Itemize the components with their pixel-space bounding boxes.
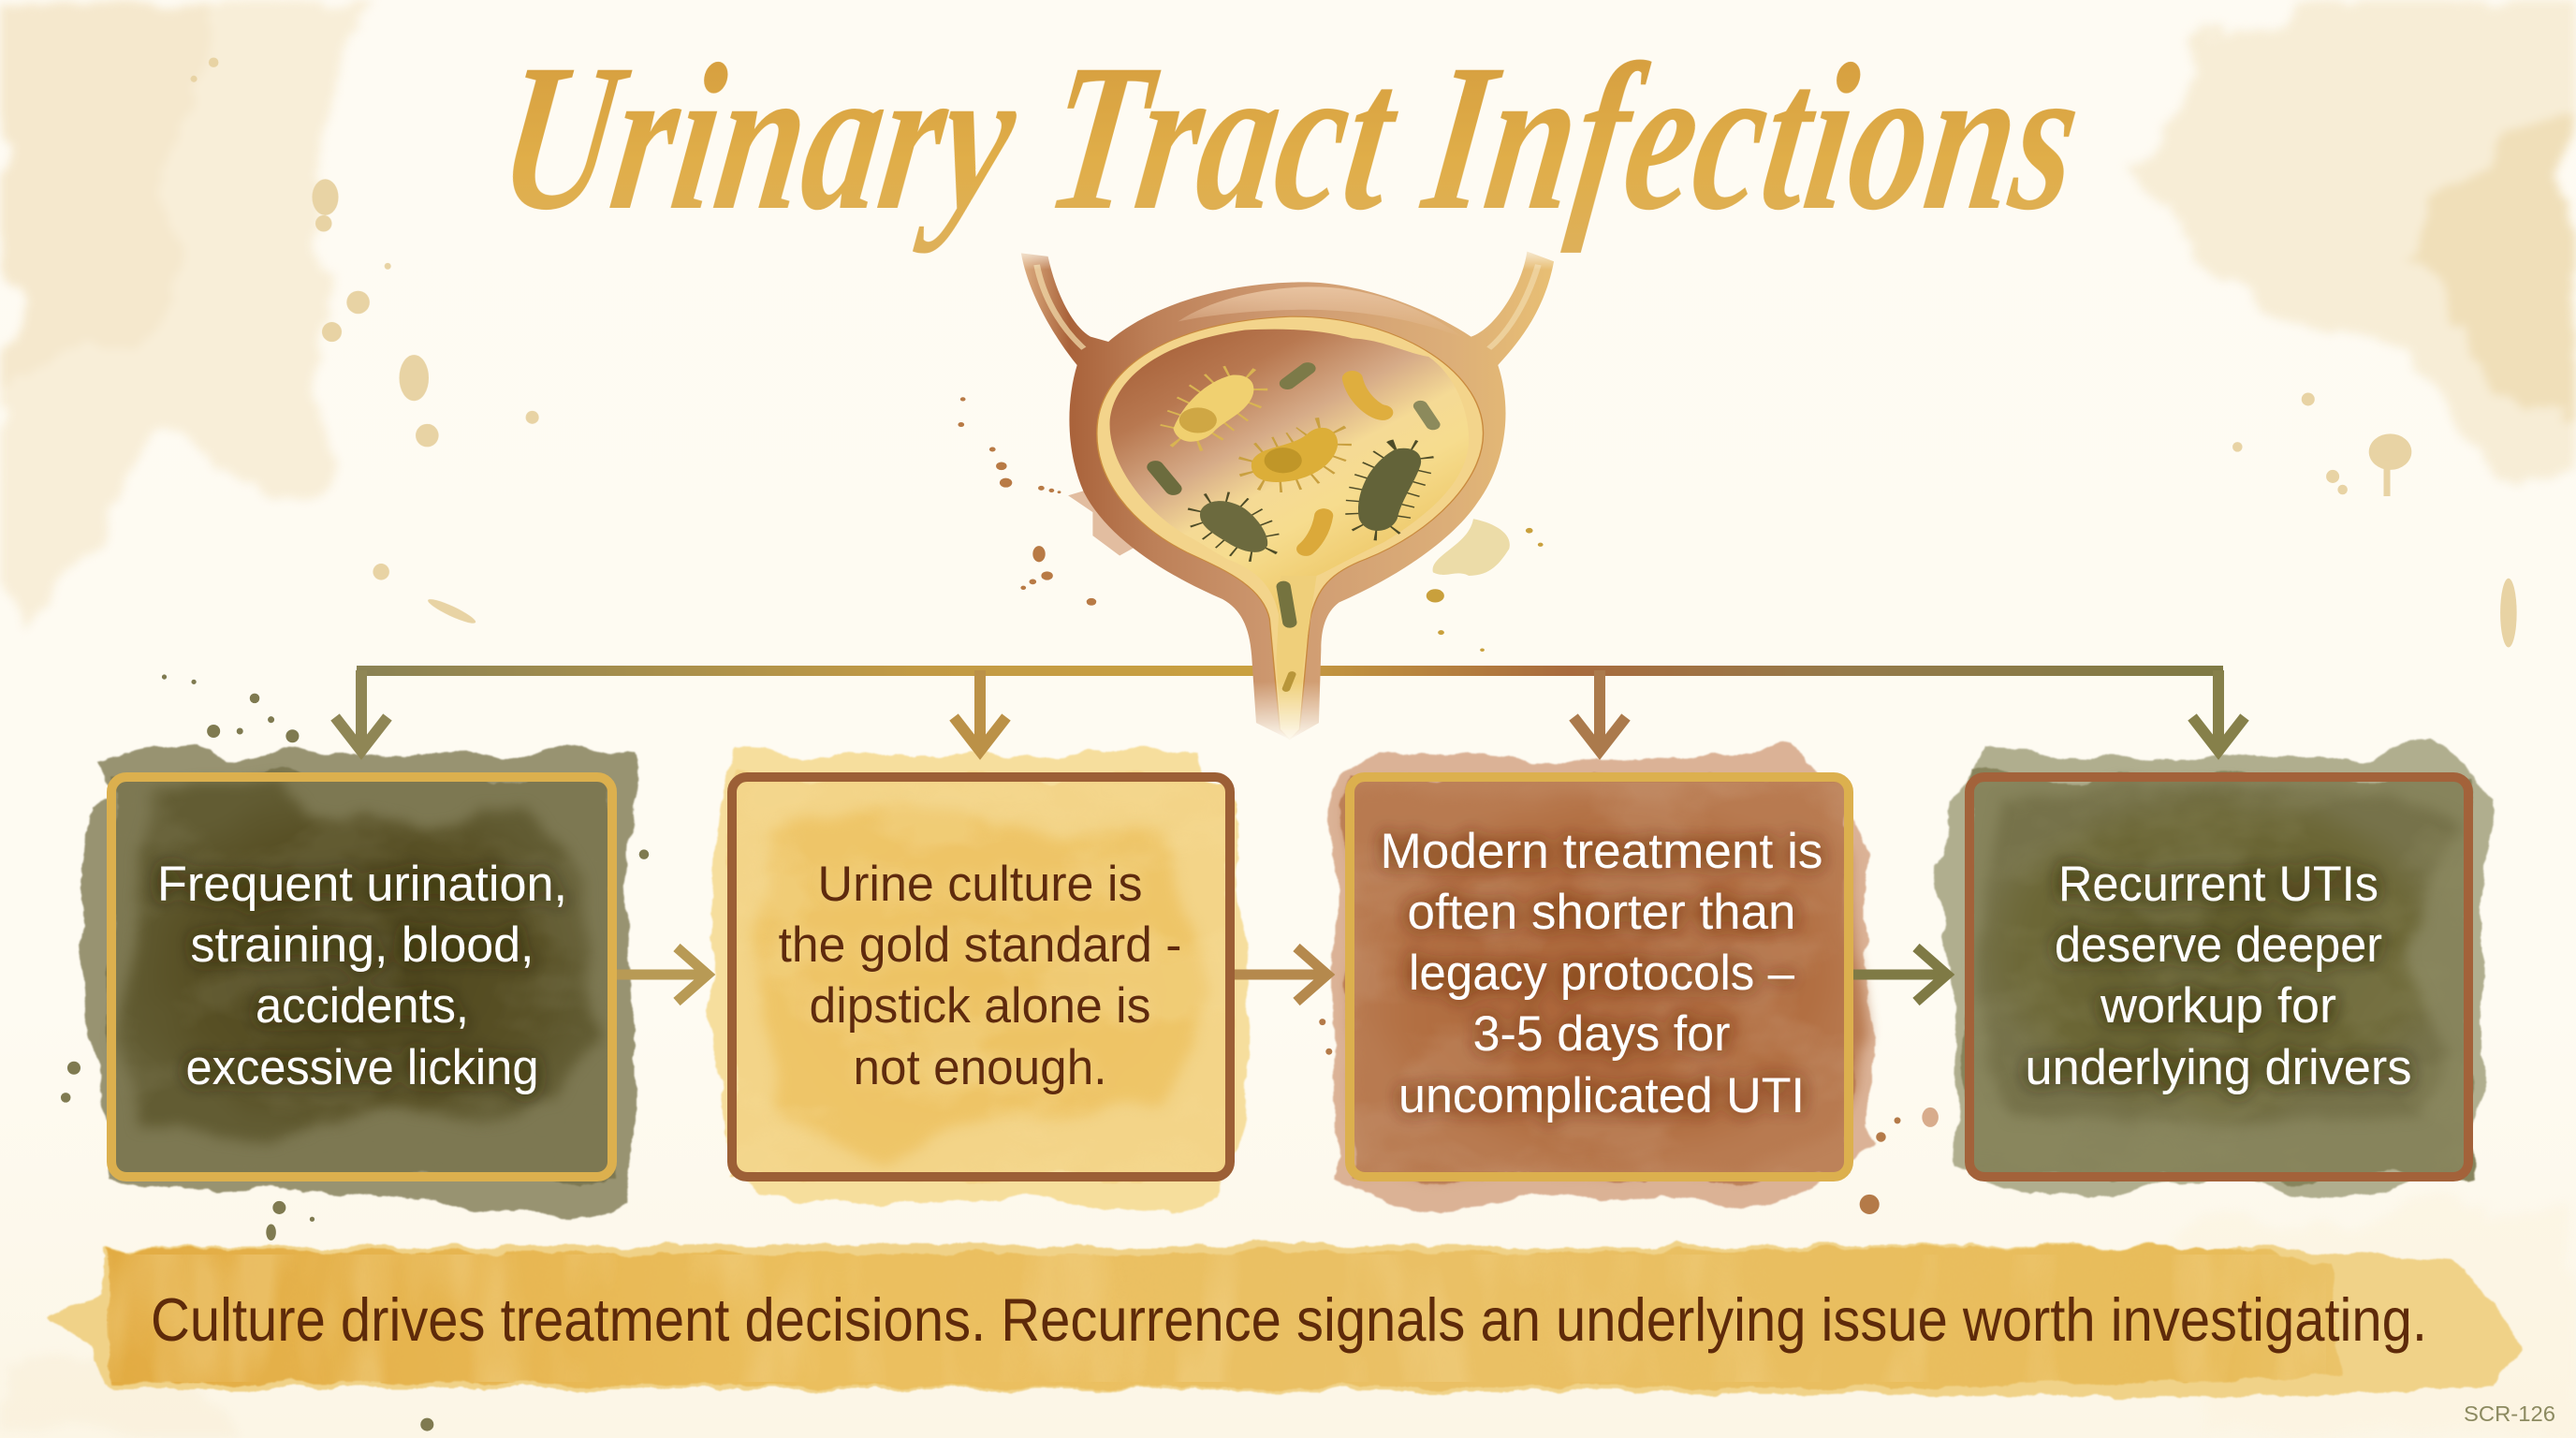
arrow: diagnosis to treatment <box>1235 947 1327 1002</box>
bacterium: gold <box>1251 428 1338 482</box>
takeaway banner <box>47 1243 2523 1397</box>
wash: recurrence <box>1935 742 2490 1198</box>
wash: symptoms <box>80 741 635 1211</box>
text: treatment: often shorter than <box>1408 885 1795 940</box>
texture: treatment <box>1354 783 1844 1171</box>
wash: diagnosis <box>708 747 1248 1211</box>
banner texture <box>108 1255 2326 1382</box>
border: treatment <box>1350 777 1849 1177</box>
panel: recurrence <box>1935 742 2490 1198</box>
wash core: treatment <box>1357 786 1866 1170</box>
text: symptoms: excessive licking <box>185 1040 539 1095</box>
arrow down to box 3 <box>1573 670 1626 753</box>
text: diagnosis: the gold standard - <box>779 917 1181 973</box>
border: diagnosis <box>732 777 1230 1177</box>
wash: treatment <box>1334 744 1877 1211</box>
source code label: SCR-126 <box>2464 1401 2555 1426</box>
text: diagnosis: dipstick alone is <box>809 978 1151 1034</box>
text: diagnosis <box>779 857 1181 1095</box>
border: symptoms <box>111 777 612 1177</box>
arrow: treatment to recurrence <box>1853 947 1947 1002</box>
urethra contents <box>1277 576 1317 729</box>
texture: recurrence <box>1974 783 2464 1171</box>
text: diagnosis: Urine culture is <box>818 857 1142 912</box>
text: recurrence: Recurrent UTIs <box>2058 857 2378 912</box>
ureter highlights <box>1037 265 1538 348</box>
arrow down to box 1 <box>335 670 388 753</box>
icon: bladder with bacteria <box>958 252 1554 740</box>
bacterium: olive left <box>1200 501 1267 552</box>
horizontal connector bar <box>357 666 2223 676</box>
wash core: recurrence <box>1978 784 2459 1121</box>
inner rim <box>1097 316 1484 740</box>
connector tree from bladder to the four boxes <box>335 666 2245 753</box>
bacterium: olive right <box>1358 448 1421 531</box>
wash core: symptoms <box>122 784 599 1145</box>
bladder body <box>1021 252 1554 740</box>
banner wash <box>47 1243 2523 1397</box>
rod bacteria <box>1155 369 1433 689</box>
text: treatment <box>1380 824 1823 1123</box>
text: treatment: legacy protocols – <box>1409 946 1795 1001</box>
text: recurrence <box>2026 857 2411 1095</box>
panel: symptoms <box>80 741 635 1211</box>
text: symptoms: Frequent urination, <box>157 857 567 912</box>
border: recurrence <box>1969 777 2468 1177</box>
bladder outer wall <box>1021 252 1554 740</box>
bladder side stains <box>1068 489 1510 576</box>
texture: symptoms <box>116 783 610 1171</box>
panel: diagnosis <box>708 747 1248 1211</box>
text: symptoms: straining, blood, <box>191 917 534 973</box>
text: treatment: Modern treatment is <box>1380 824 1823 879</box>
bacterium: yellow <box>1173 375 1253 442</box>
wash core: diagnosis <box>754 802 1205 1167</box>
panel: treatment <box>1334 744 1877 1211</box>
text: recurrence: workup for <box>2100 978 2336 1034</box>
text: recurrence: deserve deeper <box>2055 917 2382 973</box>
bladder lumen <box>1110 330 1469 626</box>
text: symptoms <box>157 857 567 1095</box>
text: recurrence: underlying drivers <box>2026 1040 2411 1095</box>
text: treatment: 3-5 days for <box>1473 1006 1730 1062</box>
text: symptoms: accidents, <box>256 978 469 1034</box>
wall highlight <box>1178 286 1447 328</box>
bladder splatter <box>958 397 1544 652</box>
text: treatment: uncomplicated UTI <box>1398 1068 1805 1123</box>
text: diagnosis: not enough. <box>854 1040 1106 1095</box>
arrow down to box 2 <box>954 670 1006 753</box>
arrow down to box 4 <box>2192 670 2245 753</box>
texture: diagnosis <box>737 783 1225 1171</box>
arrow: symptoms to diagnosis <box>617 947 708 1002</box>
